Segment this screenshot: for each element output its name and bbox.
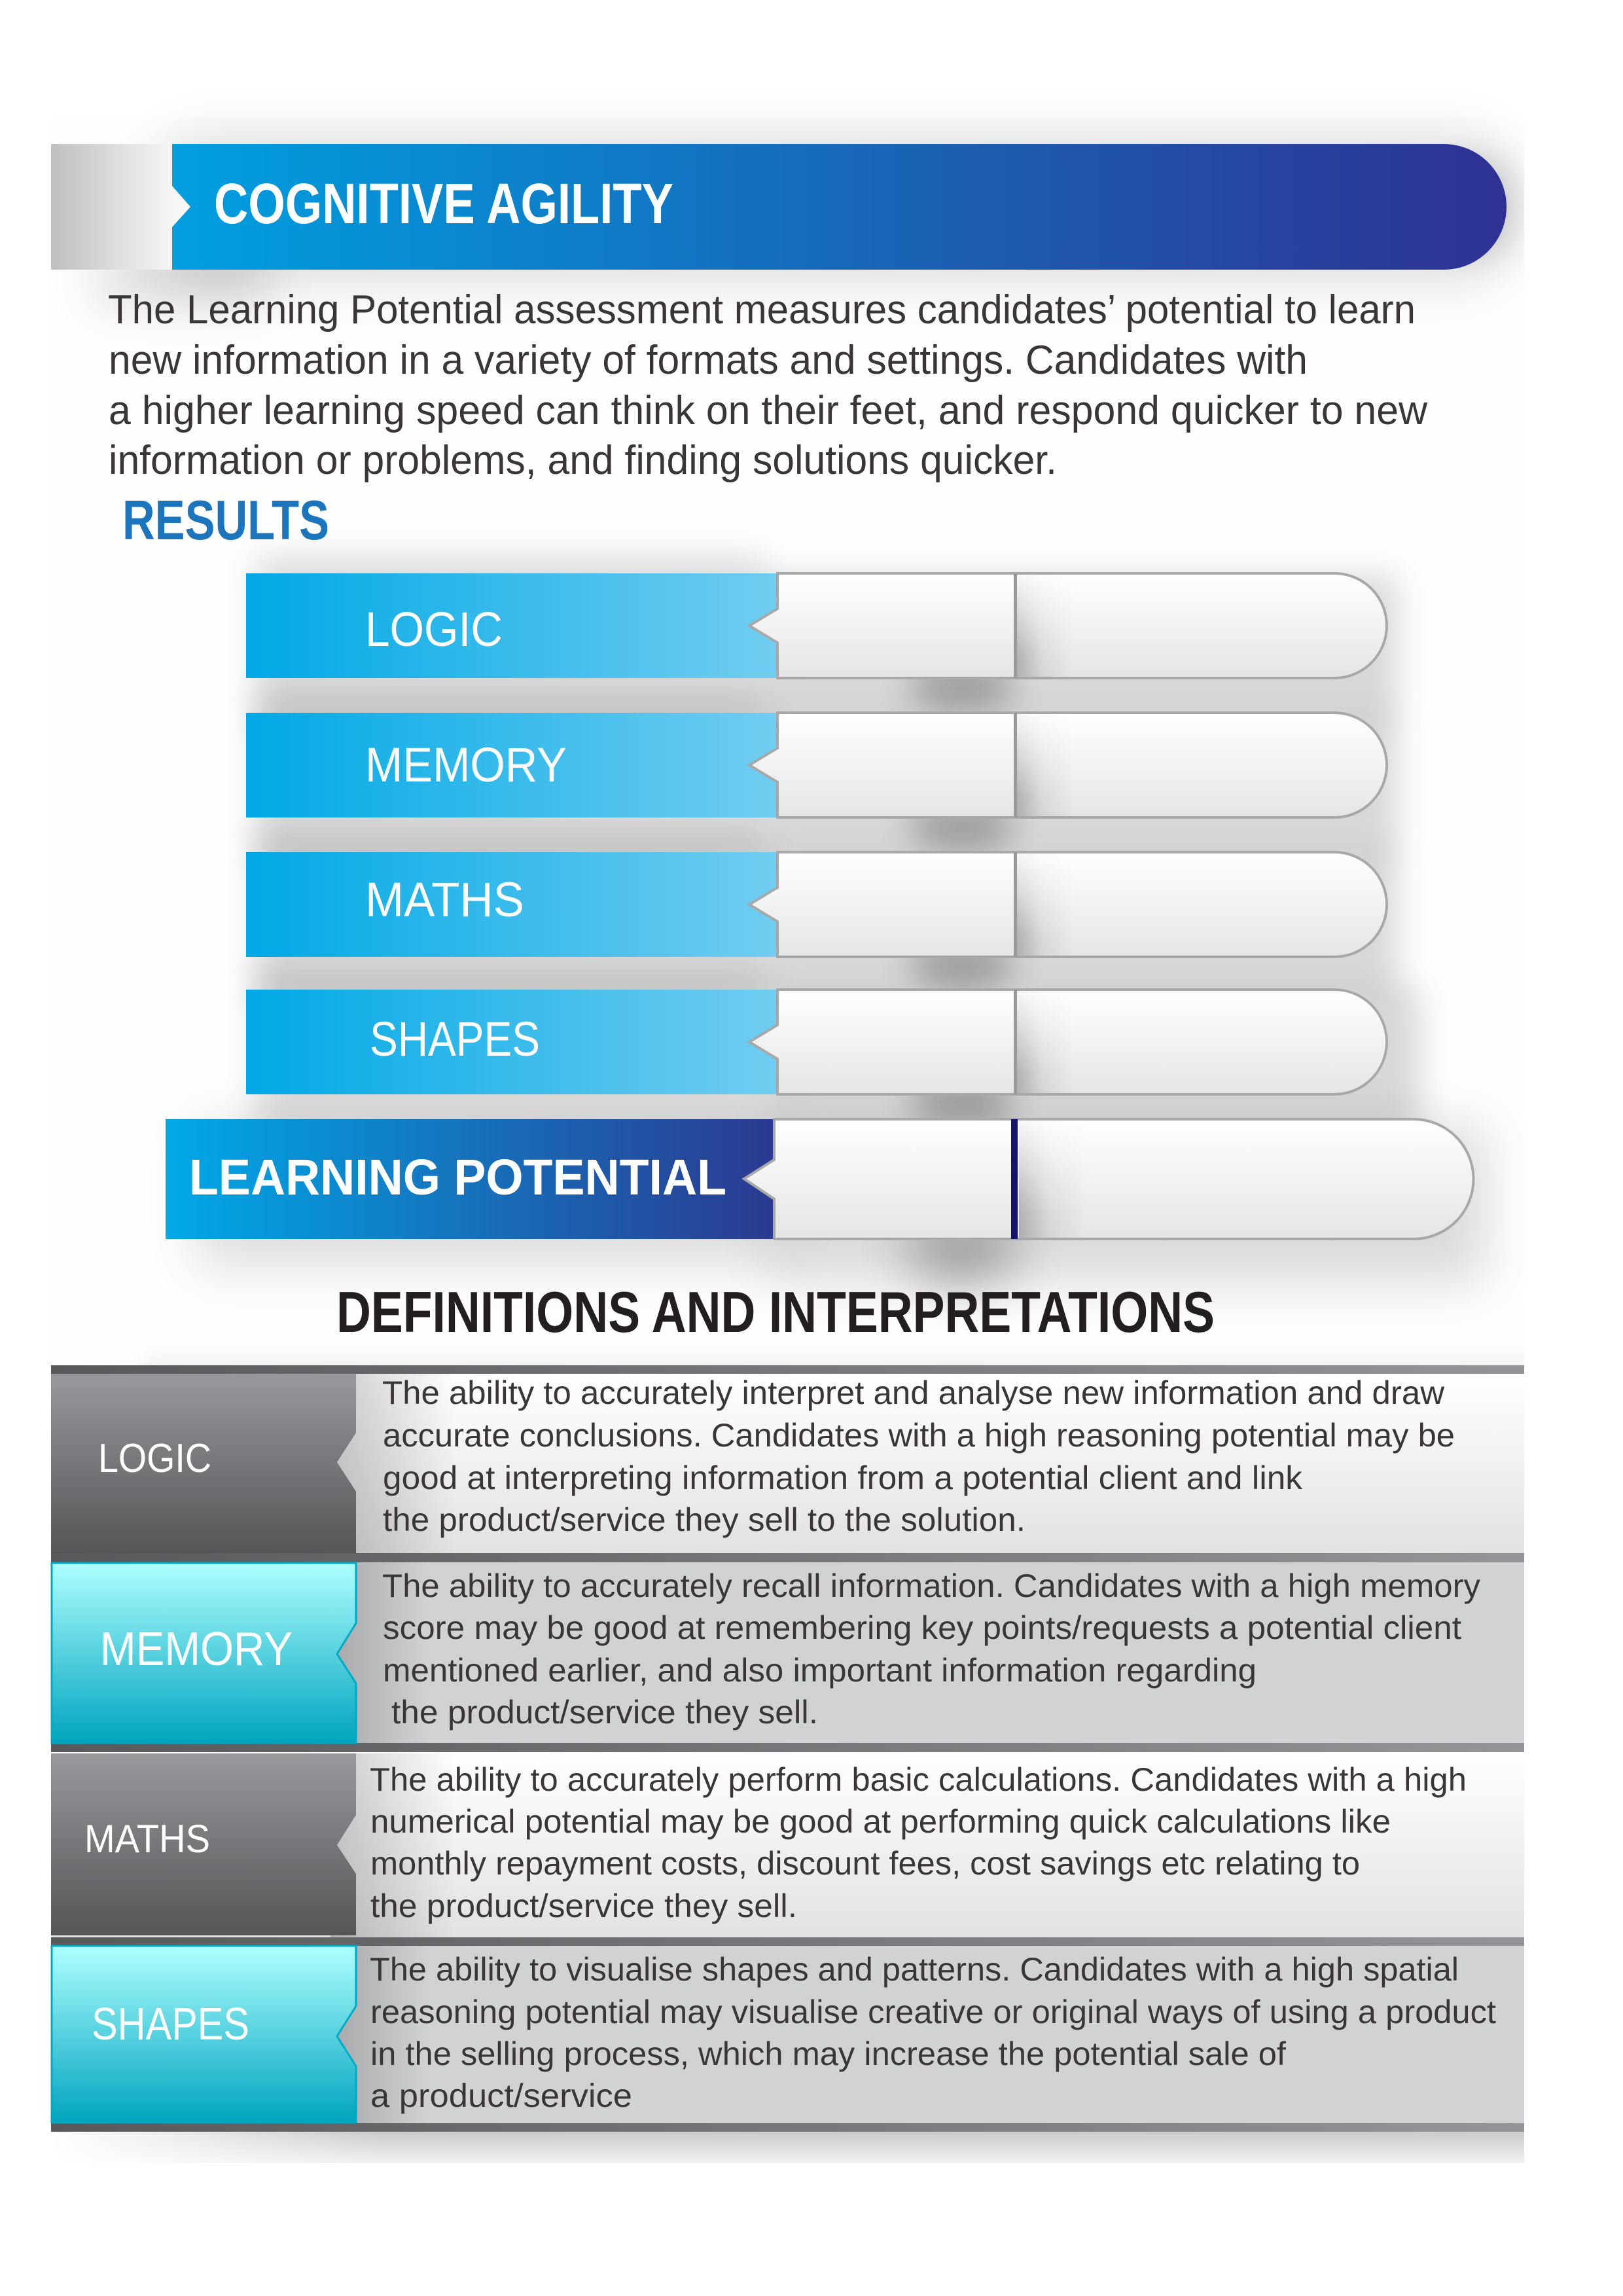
result bar: shapes: SHAPES	[370, 1012, 540, 1066]
row: shapes: reasoning potential may visualise creative or original ways of using a product	[370, 1994, 1496, 2030]
row: shapes: a product/service	[370, 2077, 632, 2114]
row: logic: accurate conclusions. Candidates with a high reasoning potential may be	[383, 1417, 1455, 1454]
row: maths: numerical potential may be good at performing quick calculations like	[370, 1803, 1391, 1840]
row: memory: MEMORY	[100, 1623, 293, 1676]
row: shapes: in the selling process, which may increase the potential sale of	[370, 2036, 1286, 2072]
intro text block: information or problems, and finding solutions quicker.	[109, 438, 1057, 483]
row: logic: The ability to accurately interpret and analyse new information and draw	[382, 1374, 1445, 1411]
row: memory	[52, 1562, 1524, 1743]
grey header tab	[51, 144, 195, 270]
blue header ribbon	[172, 144, 1507, 270]
result bar: memory: MEMORY	[365, 738, 567, 792]
header banner	[51, 144, 1507, 270]
intro text block: a higher learning speed can think on their feet, and respond quicker to new	[109, 388, 1427, 433]
result bar: logic: LOGIC	[365, 602, 503, 656]
row: memory: score may be good at remembering key points/requests a potential client	[383, 1609, 1461, 1646]
result bar: shapes	[246, 990, 1387, 1094]
row: shapes: SHAPES	[92, 1998, 249, 2049]
intro text block	[108, 287, 1427, 483]
result bar: maths	[246, 852, 1387, 957]
results heading: RESULTS	[122, 490, 329, 552]
result bar: memory	[246, 713, 1387, 817]
result bar: learning potential: LEARNING POTENTIAL	[189, 1149, 726, 1206]
row: logic: good at interpreting information from a potential client and link	[383, 1460, 1303, 1496]
definitions table	[51, 1365, 1524, 2132]
row: logic	[51, 1374, 1524, 1553]
row: memory: the product/service they sell.	[391, 1694, 818, 1731]
row: maths: The ability to accurately perform basic calculations. Candidates with a high	[370, 1761, 1467, 1798]
row: memory: The ability to accurately recall information. Candidates with a high memory	[382, 1568, 1480, 1604]
intro text block: The Learning Potential assessment measures candidates’ potential to learn	[108, 287, 1416, 332]
result bar: maths: MATHS	[365, 872, 524, 927]
title: COGNITIVE AGILITY	[214, 172, 673, 236]
row: shapes	[52, 1946, 1524, 2123]
row: logic: the product/service they sell to the solution.	[383, 1501, 1026, 1538]
definitions heading: DEFINITIONS AND INTERPRETATIONS	[336, 1280, 1215, 1344]
result bar: logic	[246, 573, 1387, 678]
result bar: learning potential	[166, 1119, 1473, 1239]
row: maths: the product/service they sell.	[370, 1888, 797, 1924]
row: maths: MATHS	[84, 1817, 210, 1861]
intro text block: new information in a variety of formats and settings. Candidates with	[109, 338, 1308, 383]
row: maths	[51, 1752, 1524, 1937]
row: logic: LOGIC	[98, 1436, 211, 1481]
row: shapes: The ability to visualise shapes and patterns. Candidates with a high spatial	[370, 1951, 1459, 1988]
row: memory: mentioned earlier, and also important information regarding	[383, 1652, 1257, 1689]
row: maths: monthly repayment costs, discount fees, cost savings etc relating to	[370, 1845, 1360, 1882]
